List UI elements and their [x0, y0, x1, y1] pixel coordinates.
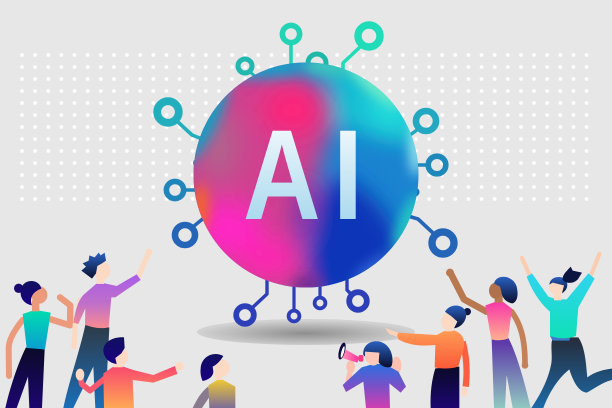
label: AI: I: [333, 104, 363, 247]
person: woman with megaphone: [337, 341, 406, 408]
label: AI: A: [243, 104, 321, 247]
AI sphere: [194, 62, 418, 288]
icon: megaphone: [337, 342, 363, 363]
node: bottom right: [347, 278, 367, 310]
node: left large: [157, 101, 202, 139]
dot pattern: [15, 49, 597, 205]
node: bottom left: [236, 280, 267, 324]
person: woman in yellow top: [193, 354, 235, 408]
person: man in purple sweater: [63, 249, 152, 408]
sphere rim: [194, 62, 418, 288]
person: man in coral shirt: [76, 337, 184, 408]
node: bottom small: [315, 282, 325, 308]
person: woman in teal top: [5, 281, 70, 408]
sphere colour fields: [194, 63, 416, 288]
people: left group: [5, 249, 235, 408]
node: left middle: [166, 181, 198, 199]
node: right hidden: [410, 188, 420, 196]
person: woman in pink top: [446, 269, 531, 408]
person: woman jumping in cyan top: [522, 254, 612, 408]
ground shadow: [197, 319, 415, 345]
node: left lower: [175, 217, 205, 245]
node: top right large: [343, 25, 380, 70]
label: AI: [246, 130, 356, 219]
node: right lower large: [408, 216, 454, 254]
node: bottom centre: [289, 282, 299, 321]
node: top behind sphere: [308, 54, 326, 72]
person: woman in orange top: [385, 306, 471, 408]
node: top centre: [282, 25, 300, 66]
sphere highlights: [194, 84, 418, 278]
node: left hidden: [193, 159, 201, 167]
node: right upper: [410, 111, 436, 135]
node: top left small: [238, 59, 256, 77]
people: right group: [337, 254, 612, 408]
node: right middle: [414, 156, 446, 174]
circuit nodes: [157, 25, 454, 324]
